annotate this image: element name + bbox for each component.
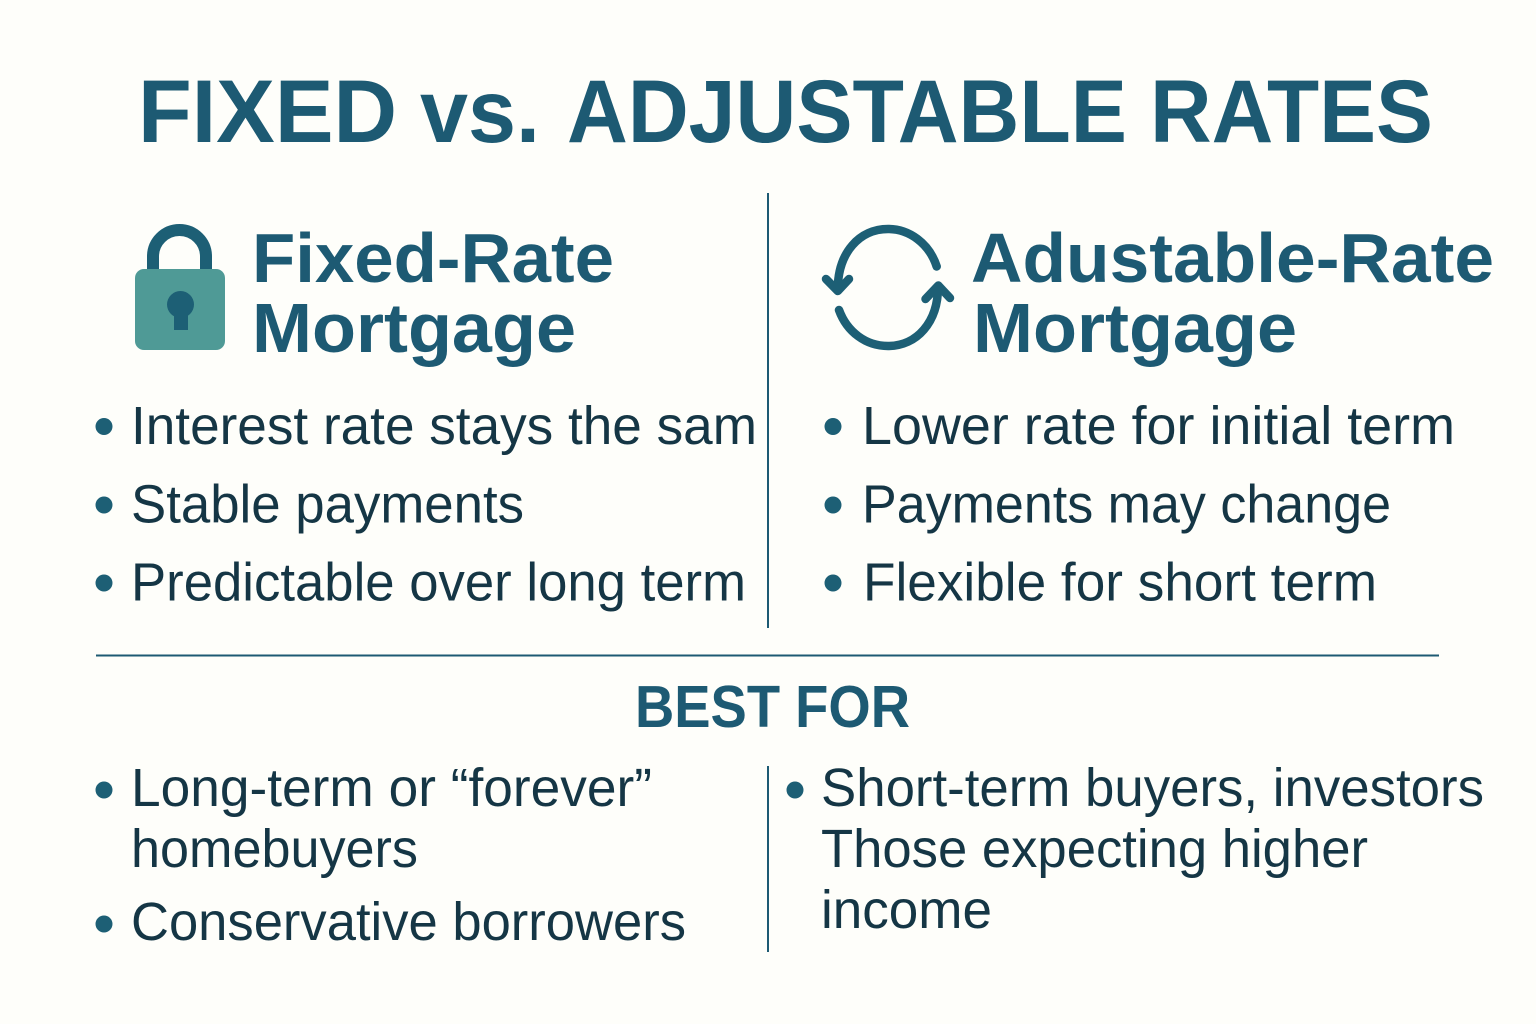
bullet list: best for adjustable-rate xyxy=(786,758,1484,940)
heading: best for: BEST FOR xyxy=(635,674,910,740)
heading: adjustable-rate mortgage: Mortgage xyxy=(973,289,1297,367)
icon: circular arrows xyxy=(826,229,950,346)
panel: fixed-rate mortgage xyxy=(96,219,757,612)
title: ADJUSTABLE xyxy=(567,61,1127,161)
bullet list: best for adjustable-rate: Short-term buyers, investors xyxy=(821,758,1484,818)
bullet list: fixed-rate features xyxy=(96,396,757,612)
heading: fixed-rate mortgage: Mortgage xyxy=(252,289,576,367)
bullet list: best for fixed-rate: Long-term or “forever” xyxy=(131,758,652,818)
bullet list: fixed-rate features: Interest rate stays the sam xyxy=(131,396,757,456)
bullet list: adjustable-rate features: Lower rate for initial term xyxy=(862,396,1455,456)
bullet list: best for adjustable-rate: Those expecting higher xyxy=(821,819,1368,879)
title: vs. xyxy=(420,61,540,161)
heading: fixed-rate mortgage xyxy=(252,219,614,367)
bullet list: best for fixed-rate: Conservative borrowers xyxy=(131,892,686,952)
bullet list: fixed-rate features: Predictable over long term xyxy=(131,552,746,612)
panel: adjustable-rate mortgage xyxy=(824,219,1494,612)
heading: fixed-rate mortgage: Fixed-Rate xyxy=(252,219,614,297)
bullet list: fixed-rate features: Stable payments xyxy=(131,474,524,534)
bullet list: adjustable-rate features xyxy=(824,396,1455,612)
bullet list: best for fixed-rate: homebuyers xyxy=(131,819,418,879)
title: FIXED xyxy=(138,61,397,161)
heading: adjustable-rate mortgage: Adustable-Rate xyxy=(971,219,1494,297)
bullet list: adjustable-rate features: Payments may change xyxy=(862,474,1391,534)
bullet list: best for adjustable-rate: income xyxy=(821,880,992,940)
bullet list: adjustable-rate features: Flexible for short term xyxy=(863,552,1377,612)
bullet list: best for fixed-rate xyxy=(96,758,686,952)
title: RATES xyxy=(1150,61,1433,161)
heading: adjustable-rate mortgage xyxy=(971,219,1494,367)
icon: padlock xyxy=(135,230,225,350)
title xyxy=(138,61,1433,161)
